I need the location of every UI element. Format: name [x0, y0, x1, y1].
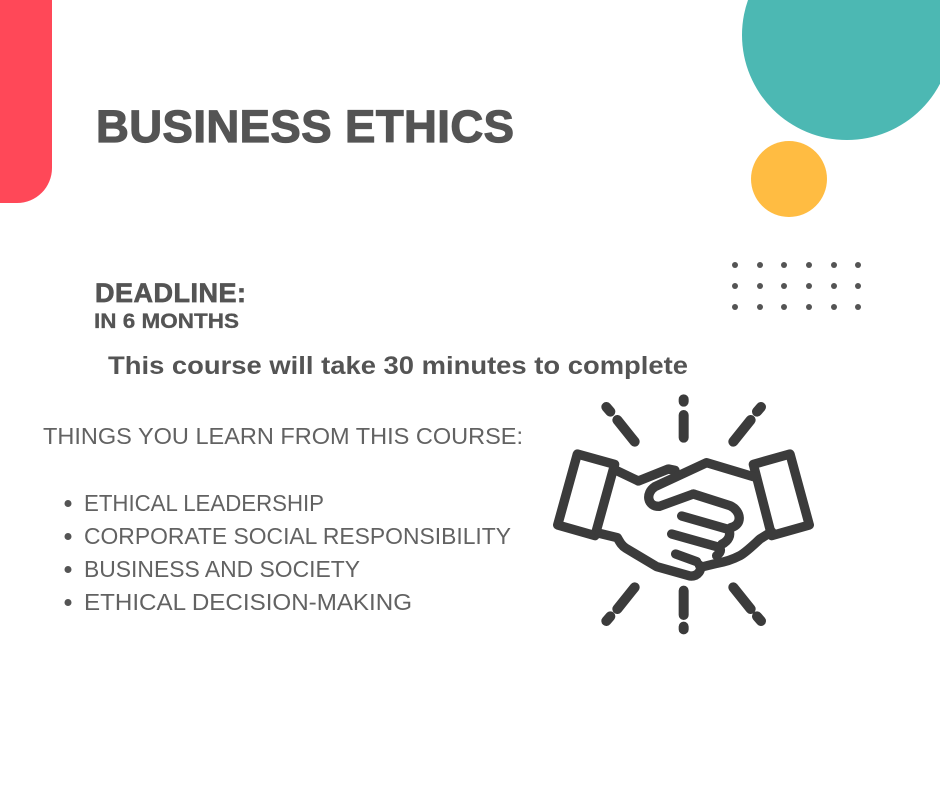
- icon: right cuff: [753, 454, 809, 536]
- icon: rays: [606, 399, 761, 629]
- yellow circle: [751, 141, 827, 217]
- teal circle: [742, 0, 940, 140]
- list heading: THINGS YOU LEARN FROM THIS COURSE:: [43, 423, 523, 449]
- title: BUSINESS ETHICS: [96, 101, 514, 152]
- list item: ethical decision-making: ETHICAL DECISION-MAKING: [84, 589, 412, 615]
- list item: business and society: BUSINESS AND SOCIETY: [84, 556, 360, 582]
- deadline heading: DEADLINE:: [95, 278, 246, 308]
- red corner bar: [0, 0, 52, 203]
- course duration: This course will take 30 minutes to complete: [108, 352, 688, 380]
- deadline value: IN 6 MONTHS: [94, 310, 239, 333]
- icon: left cuff: [558, 454, 615, 536]
- dot grid: [732, 262, 861, 310]
- list item: corporate social responsibility: CORPORATE SOCIAL RESPONSIBILITY: [84, 523, 511, 549]
- icon: hands: [599, 463, 772, 576]
- learning topics list: [64, 490, 511, 615]
- list item: ethical leadership: ETHICAL LEADERSHIP: [84, 490, 324, 516]
- icon: handshake: [558, 399, 809, 629]
